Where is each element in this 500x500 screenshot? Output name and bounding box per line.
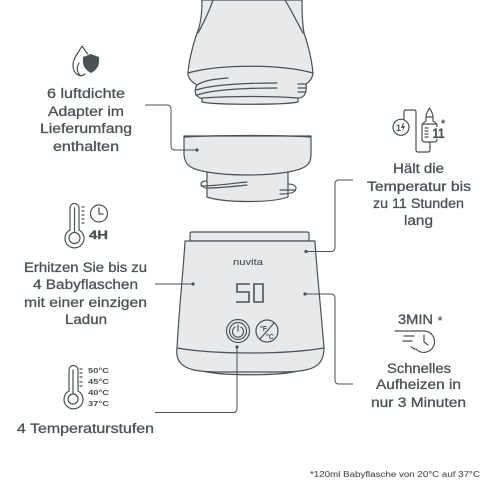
icon: thermometer with temperature levels <box>64 366 110 409</box>
text: adapters: enthalten <box>53 139 119 154</box>
display reading <box>236 284 263 302</box>
text: fast heating: Schnelles <box>387 361 451 376</box>
icon: three minutes stopwatch: * <box>438 315 443 327</box>
text: four bottles: 4 Babyflaschen <box>33 277 138 292</box>
icon: thermometer with clock <box>65 204 108 248</box>
text: adapters <box>40 86 132 154</box>
leader: temperature levels <box>155 345 239 412</box>
text: fast heating <box>371 361 466 410</box>
text: four bottles <box>24 260 147 327</box>
temperature unit button <box>256 320 278 342</box>
icon: thermometer with temperature levels: 40°C <box>88 388 110 397</box>
footnote: *120ml Babyflasche von 20°C auf 37°C <box>310 469 480 479</box>
text: keeps temperature <box>367 161 471 228</box>
icon: charge and bottle eleven hours <box>393 108 446 152</box>
temperature unit button: °F <box>260 325 268 333</box>
leader: fast heating <box>303 292 353 384</box>
text: four bottles: Erhitzen Sie bis zu <box>24 260 147 275</box>
text: keeps temperature: lang <box>404 213 433 228</box>
icon: drop and shield <box>73 46 99 76</box>
icon: charge and bottle eleven hours: 11 <box>432 125 445 141</box>
text: fast heating: Aufheizen in <box>376 377 461 392</box>
text: keeps temperature: Temperatur bis <box>367 179 471 194</box>
leader: four bottles <box>155 282 195 286</box>
product: warmer base <box>177 232 324 375</box>
text: keeps temperature: Hält die <box>393 161 444 176</box>
icon: charge and bottle eleven hours: 1 <box>396 123 401 133</box>
power button <box>226 320 250 342</box>
text: adapters: 6 luftdichte <box>47 86 125 101</box>
logo: nuvita <box>233 257 264 268</box>
text: keeps temperature: zu 11 Stunden <box>373 196 464 211</box>
icon: thermometer with clock: 4H <box>89 228 108 242</box>
icon: thermometer with temperature levels: 50°C <box>88 366 110 375</box>
leader: keeps temperature <box>304 180 353 253</box>
text: adapters: Adapter im <box>48 104 124 119</box>
temperature unit button: °C <box>266 333 274 341</box>
product: bottle top <box>188 0 313 104</box>
icon: thermometer with temperature levels: 45°C <box>88 377 110 386</box>
product: adapter <box>184 136 311 202</box>
text: fast heating: nur 3 Minuten <box>371 395 466 410</box>
icon: three minutes stopwatch <box>395 312 443 352</box>
text: temperature levels: 4 Temperaturstufen <box>17 421 154 436</box>
text: adapters: Lieferumfang <box>40 121 132 136</box>
text: four bottles: mit einer einzigen <box>24 295 147 310</box>
leader: adapters <box>145 105 199 152</box>
text: four bottles: Ladun <box>65 312 107 327</box>
icon: charge and bottle eleven hours: * <box>441 118 446 130</box>
icon: three minutes stopwatch: 3MIN <box>398 312 433 327</box>
icon: thermometer with temperature levels: 37°C <box>88 399 110 408</box>
